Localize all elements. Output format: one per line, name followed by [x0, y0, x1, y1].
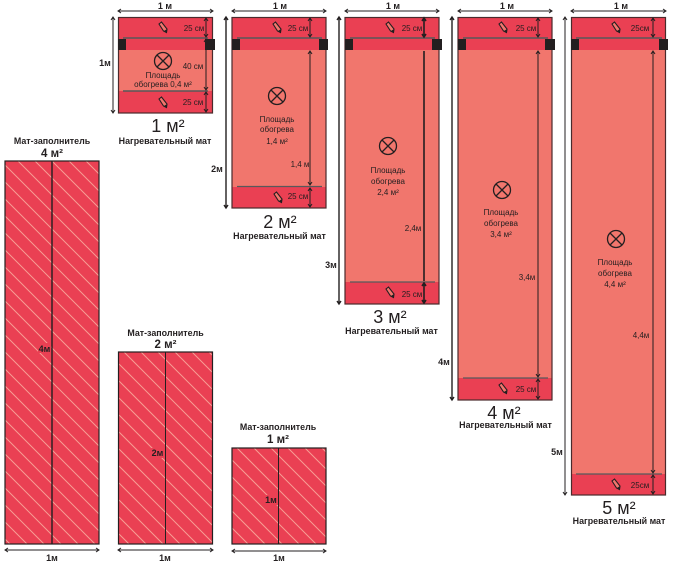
mat 3 caption: Нагревательный мат	[345, 326, 438, 336]
filler mat 4 m2	[5, 136, 99, 563]
mat 3 area text: обогрева	[371, 177, 406, 186]
mat 4 caption: 4 м²	[487, 403, 521, 423]
icon: mat 2 crossed circle	[268, 88, 286, 104]
mat 2 area text: Площадь	[260, 115, 294, 124]
icon: mat 5 crossed circle	[608, 230, 624, 248]
filler 4 width dimension	[5, 548, 99, 563]
mat 4 body	[458, 17, 555, 400]
mat 5 caption: 5 м²	[602, 498, 636, 518]
mat 4 area text	[484, 208, 519, 239]
mat 5 dimension lines	[651, 18, 655, 494]
mat 1 caption: Нагревательный мат	[119, 136, 212, 146]
mat 1 area text: Площадь	[146, 71, 180, 80]
filler 2 heading: Мат-заполнитель	[127, 328, 204, 338]
mat 2 height dimension: 2м	[211, 164, 223, 174]
icon: mat 2 sensor bottom	[274, 192, 282, 202]
mat 2 labels	[288, 24, 309, 201]
mat 4 dimension lines	[536, 18, 540, 399]
filler 1 heading	[240, 422, 317, 446]
mat 2 dimension lines	[308, 18, 312, 207]
mat 5 width dimension: 1 м	[614, 1, 628, 11]
mat 4 height dimension	[438, 17, 454, 400]
mat 4 labels	[516, 24, 536, 394]
mat 3 labels	[402, 24, 422, 299]
mat 2 height dimension	[211, 17, 228, 208]
icon: mat 3 sensor top	[386, 22, 394, 32]
heating mat 1 m2	[99, 1, 215, 146]
mat 1 caption: 1 м²	[151, 116, 185, 136]
mat 4 width dimension: 1 м	[500, 1, 514, 11]
mat 2 width dimension: 1 м	[273, 1, 287, 11]
mat 3 width dimension: 1 м	[386, 1, 400, 11]
mat 3 caption: 3 м²	[373, 307, 407, 327]
filler mat 2 m2	[118, 328, 213, 563]
icon: mat 3 crossed circle	[380, 138, 396, 154]
mat 3 height dimension: 3м	[325, 260, 337, 270]
mat 4 labels: 25 см	[516, 385, 536, 394]
mat 4 height dimension: 4м	[438, 357, 450, 367]
mat 2 caption: 2 м²	[263, 212, 297, 232]
mat 5 labels: 25см	[631, 481, 649, 490]
icon: mat 4 sensor bottom	[499, 383, 507, 394]
mat 3 labels: 25 см	[402, 24, 422, 33]
filler 1 heading: Мат-заполнитель	[240, 422, 317, 432]
mat 2 labels: 25 см	[288, 24, 308, 33]
mat 1 area text	[134, 71, 192, 89]
heating mat 3 m2	[325, 1, 442, 336]
mat 5 labels: 4,4м	[633, 331, 649, 340]
mat 3 caption	[345, 307, 438, 336]
filler 4 height label: 4м	[39, 344, 51, 354]
filler 4 heading: Мат-заполнитель	[14, 136, 91, 146]
mat 5 area text: Площадь	[598, 258, 632, 267]
mat 1 height dimension	[99, 17, 115, 113]
mat 1 area text: обогрева 0,4 м²	[134, 80, 192, 89]
heating mat 2 m2	[211, 1, 328, 241]
filler 2 heading	[127, 328, 204, 351]
mat 4 area text: Площадь	[484, 208, 518, 217]
mat 1 width dimension	[118, 1, 213, 13]
mat 2 labels: 25 см	[288, 192, 308, 201]
mat 4 width dimension	[458, 1, 552, 13]
mat 1 height dimension: 1м	[99, 58, 111, 68]
mat 5 area text	[598, 258, 633, 289]
mat 3 area text	[371, 166, 406, 197]
mat 1 width dimension: 1 м	[158, 1, 172, 11]
mat 1 labels: 40 см	[183, 62, 203, 71]
mat 1 body	[118, 17, 215, 113]
filler 1 width dimension: 1м	[273, 553, 285, 563]
filler 2 width dimension	[118, 548, 213, 563]
mat 3 height dimension	[325, 17, 341, 304]
mat 2 caption	[233, 212, 326, 241]
filler 1 height label: 1м	[265, 495, 277, 505]
mat 4 area text: 3,4 м²	[490, 230, 512, 239]
mat 3 width dimension	[345, 1, 439, 13]
icon: mat 1 sensor bottom	[159, 97, 167, 108]
mat 4 caption: Нагревательный мат	[459, 420, 552, 430]
icon: mat 2 sensor top	[273, 22, 281, 32]
filler 1 width dimension	[232, 549, 326, 563]
mat 1 dimension lines	[204, 18, 208, 112]
mat 4 caption	[459, 403, 552, 430]
icon: mat 5 sensor top	[612, 22, 620, 32]
filler 4 heading: 4 м²	[41, 148, 63, 160]
mat 3 labels: 25 см	[402, 290, 422, 299]
mat 5 body	[571, 17, 668, 495]
filler 2 heading: 2 м²	[155, 339, 177, 351]
mat 2 width dimension	[232, 1, 326, 13]
mat 5 area text: обогрева	[598, 269, 633, 278]
mat 4 labels: 25 см	[516, 24, 536, 33]
mat 1 labels: 25 см	[183, 98, 203, 107]
filler 4 heading	[14, 136, 91, 160]
mat 4 labels: 3,4м	[519, 273, 535, 282]
mat 5 height dimension: 5м	[551, 447, 563, 457]
filler 1 heading: 1 м²	[267, 434, 289, 446]
mat 5 height dimension	[551, 17, 567, 495]
icon: mat 4 sensor top	[499, 22, 507, 32]
mat 1 caption	[119, 116, 212, 146]
icon: mat 5 sensor bottom	[612, 479, 620, 490]
mat 2 area text	[260, 115, 295, 146]
mat 1 labels	[183, 24, 204, 107]
mat 5 labels	[631, 24, 649, 490]
icon: mat 4 crossed circle	[494, 182, 510, 198]
filler 4 width dimension: 1м	[46, 553, 58, 563]
mat 4 area text: обогрева	[484, 219, 519, 228]
mat 2 body	[232, 17, 328, 208]
mat 5 area text: 4,4 м²	[604, 280, 626, 289]
icon: mat 1 crossed circle	[154, 52, 172, 70]
mat 2 labels: 1,4 м	[291, 160, 309, 169]
mat 3 area text: Площадь	[371, 166, 405, 175]
heating mat 5 m2	[551, 1, 668, 526]
filler 2 height label: 2м	[152, 448, 164, 458]
mat 3 area text: 2,4 м²	[377, 188, 399, 197]
icon: mat 1 sensor top	[159, 22, 167, 32]
mat 5 caption: Нагревательный мат	[573, 516, 666, 526]
mat 2 caption: Нагревательный мат	[233, 231, 326, 241]
mat 3 body	[345, 17, 442, 304]
heating mat 4 m2	[438, 1, 555, 430]
mat 3 labels: 2,4м	[405, 224, 421, 233]
filler 2 width dimension: 1м	[159, 553, 171, 563]
mat 5 width dimension	[571, 1, 666, 13]
mat 5 labels: 25см	[631, 24, 649, 33]
filler mat 1 m2	[232, 422, 326, 563]
mat 1 labels: 25 см	[184, 24, 204, 33]
mat 3 dimension lines	[422, 18, 426, 303]
mat 5 caption	[573, 498, 666, 526]
icon: mat 3 sensor bottom	[386, 287, 394, 298]
mat 2 area text: 1,4 м²	[266, 137, 288, 146]
mat 2 area text: обогрева	[260, 125, 295, 134]
